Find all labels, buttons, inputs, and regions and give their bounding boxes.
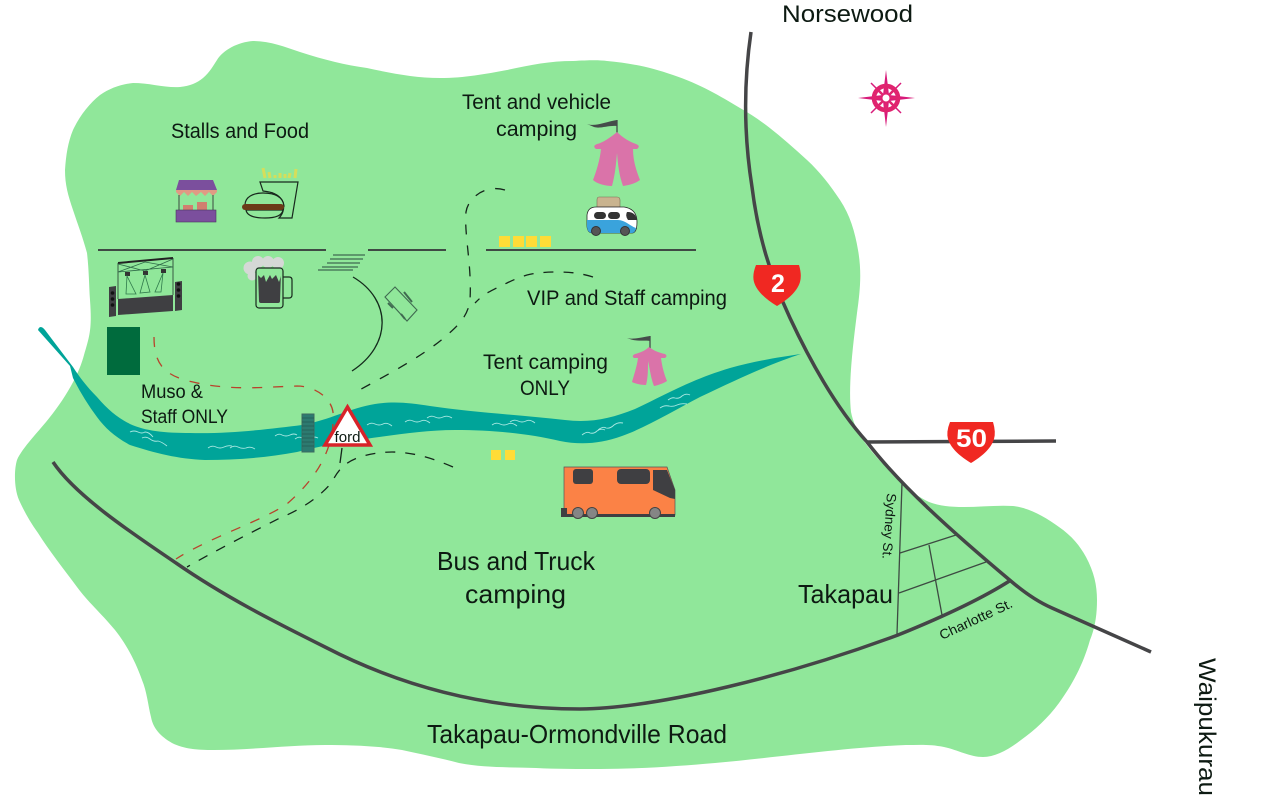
- icon: compass rose: [858, 70, 915, 127]
- dashed route: bus and truck track: [187, 452, 453, 567]
- label: Charlotte St.: Charlotte St.: [937, 596, 1015, 643]
- highway shield 50: [947, 422, 995, 463]
- dashed route: muso and staff: [154, 337, 333, 559]
- label: Muso and Staff ONLY: Muso &: [141, 382, 203, 403]
- icon: burger and fries: [242, 168, 298, 218]
- label: Muso and Staff ONLY: Staff ONLY: [141, 407, 228, 428]
- label: Muso and Staff ONLY: [141, 382, 228, 428]
- label: VIP and Staff camping: VIP and Staff camping: [527, 287, 727, 310]
- label: Tent camping ONLY: Tent camping: [483, 351, 608, 374]
- icon: stage with speakers: [109, 258, 182, 317]
- yellow markers: lower: [491, 450, 515, 460]
- label: Norsewood: Norsewood: [782, 1, 913, 28]
- icon: small pink tent: [627, 336, 667, 386]
- dashed route: tent and vehicle track: [352, 189, 505, 394]
- yellow markers: upper: [499, 236, 551, 247]
- town streets: [897, 483, 986, 634]
- label: Bus and Truck camping: [437, 546, 596, 609]
- dashed route: ford spur: [340, 448, 342, 463]
- label: Waipukurau: Waipukurau: [1193, 658, 1220, 796]
- green festival land area: [15, 41, 1097, 769]
- road: Takapau-Ormondville Road: [53, 462, 1011, 709]
- label: Sydney St.: Sydney St.: [879, 493, 899, 560]
- label: Takapau: Takapau: [798, 579, 893, 609]
- ford warning sign: ford: [334, 430, 360, 446]
- road: state highway 2: [746, 32, 1151, 652]
- label: Tent and vehicle camping: [462, 91, 611, 141]
- label: Tent camping ONLY: [483, 351, 608, 400]
- icon: camper van: [587, 197, 637, 236]
- highway shield 2: 2: [771, 270, 785, 298]
- icon: beer mug: [244, 256, 292, 308]
- label: Bus and Truck camping: camping: [465, 579, 566, 609]
- icon: orange bus: [561, 467, 675, 518]
- site boundary lines: [98, 249, 696, 251]
- dashed route: VIP track: [475, 272, 593, 303]
- icon: steps: [318, 255, 365, 270]
- river ripples: [130, 394, 690, 449]
- label: Tent and vehicle camping: Tent and vehicle: [462, 91, 611, 114]
- river: [38, 327, 801, 460]
- icon: stalls: [176, 180, 217, 222]
- label: Tent camping ONLY: ONLY: [520, 377, 570, 400]
- label: Stalls and Food: Stalls and Food: [171, 120, 309, 143]
- icon: vehicle outline: [385, 287, 417, 321]
- icon: large pink tent: [587, 120, 640, 186]
- arc stage boundary: [352, 277, 382, 371]
- highway shield 2: [753, 265, 801, 306]
- highway shield 50: 50: [956, 425, 987, 453]
- label: Bus and Truck camping: Bus and Truck: [437, 546, 596, 576]
- icon: green building: [107, 327, 140, 375]
- icon: footbridge: [302, 414, 314, 452]
- ford warning sign: [325, 407, 370, 446]
- label: Takapau-Ormondville Road: Takapau-Ormondville Road: [427, 719, 727, 749]
- road: state highway 50: [867, 441, 1056, 442]
- label: Tent and vehicle camping: camping: [496, 118, 577, 141]
